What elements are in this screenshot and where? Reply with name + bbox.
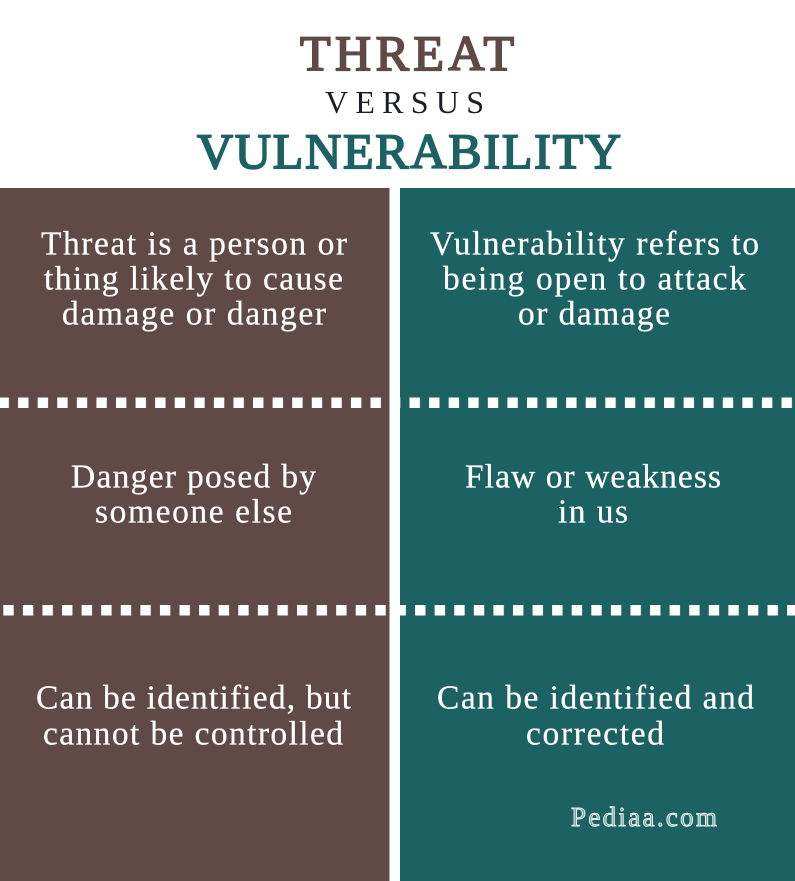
text: threat definition: Threat is a person or bbox=[41, 226, 347, 262]
text: threat control: cannot be controlled bbox=[43, 716, 343, 752]
text: vulnerability correction: Can be identified and bbox=[437, 680, 754, 716]
text: threat control bbox=[36, 680, 352, 752]
text: threat definition: thing likely to cause bbox=[44, 260, 343, 298]
heading: vulnerability: VULNERABILITY bbox=[197, 123, 621, 179]
heading: versus: VERSUS bbox=[325, 84, 484, 120]
text: vulnerability correction: corrected bbox=[526, 716, 664, 752]
text: threat definition: damage or danger bbox=[62, 296, 326, 332]
text: threat source: someone else bbox=[95, 494, 292, 530]
panel: vulnerability column bbox=[400, 188, 795, 881]
text: vulnerability source bbox=[465, 458, 721, 530]
dotted divider: lower bbox=[0, 605, 795, 616]
logo: Pediaa.com: Pediaa.com bbox=[571, 802, 717, 832]
text: threat control: Can be identified, but bbox=[36, 680, 352, 716]
text: vulnerability source: in us bbox=[558, 494, 628, 530]
text: vulnerability definition bbox=[430, 226, 759, 332]
text: threat source: Danger posed by bbox=[71, 458, 316, 496]
text: vulnerability correction bbox=[437, 680, 754, 752]
text: threat definition bbox=[41, 226, 347, 332]
text: vulnerability definition: being open to attack bbox=[443, 260, 746, 298]
dotted divider: upper bbox=[0, 398, 795, 408]
text: vulnerability definition: or damage bbox=[518, 296, 670, 332]
text: vulnerability definition: Vulnerability refers to bbox=[430, 226, 759, 262]
text: vulnerability source: Flaw or weakness bbox=[465, 458, 721, 496]
panel: threat column bbox=[0, 188, 390, 881]
text: threat source bbox=[71, 458, 316, 530]
heading: threat: THREAT bbox=[300, 25, 514, 81]
title bbox=[197, 25, 621, 179]
